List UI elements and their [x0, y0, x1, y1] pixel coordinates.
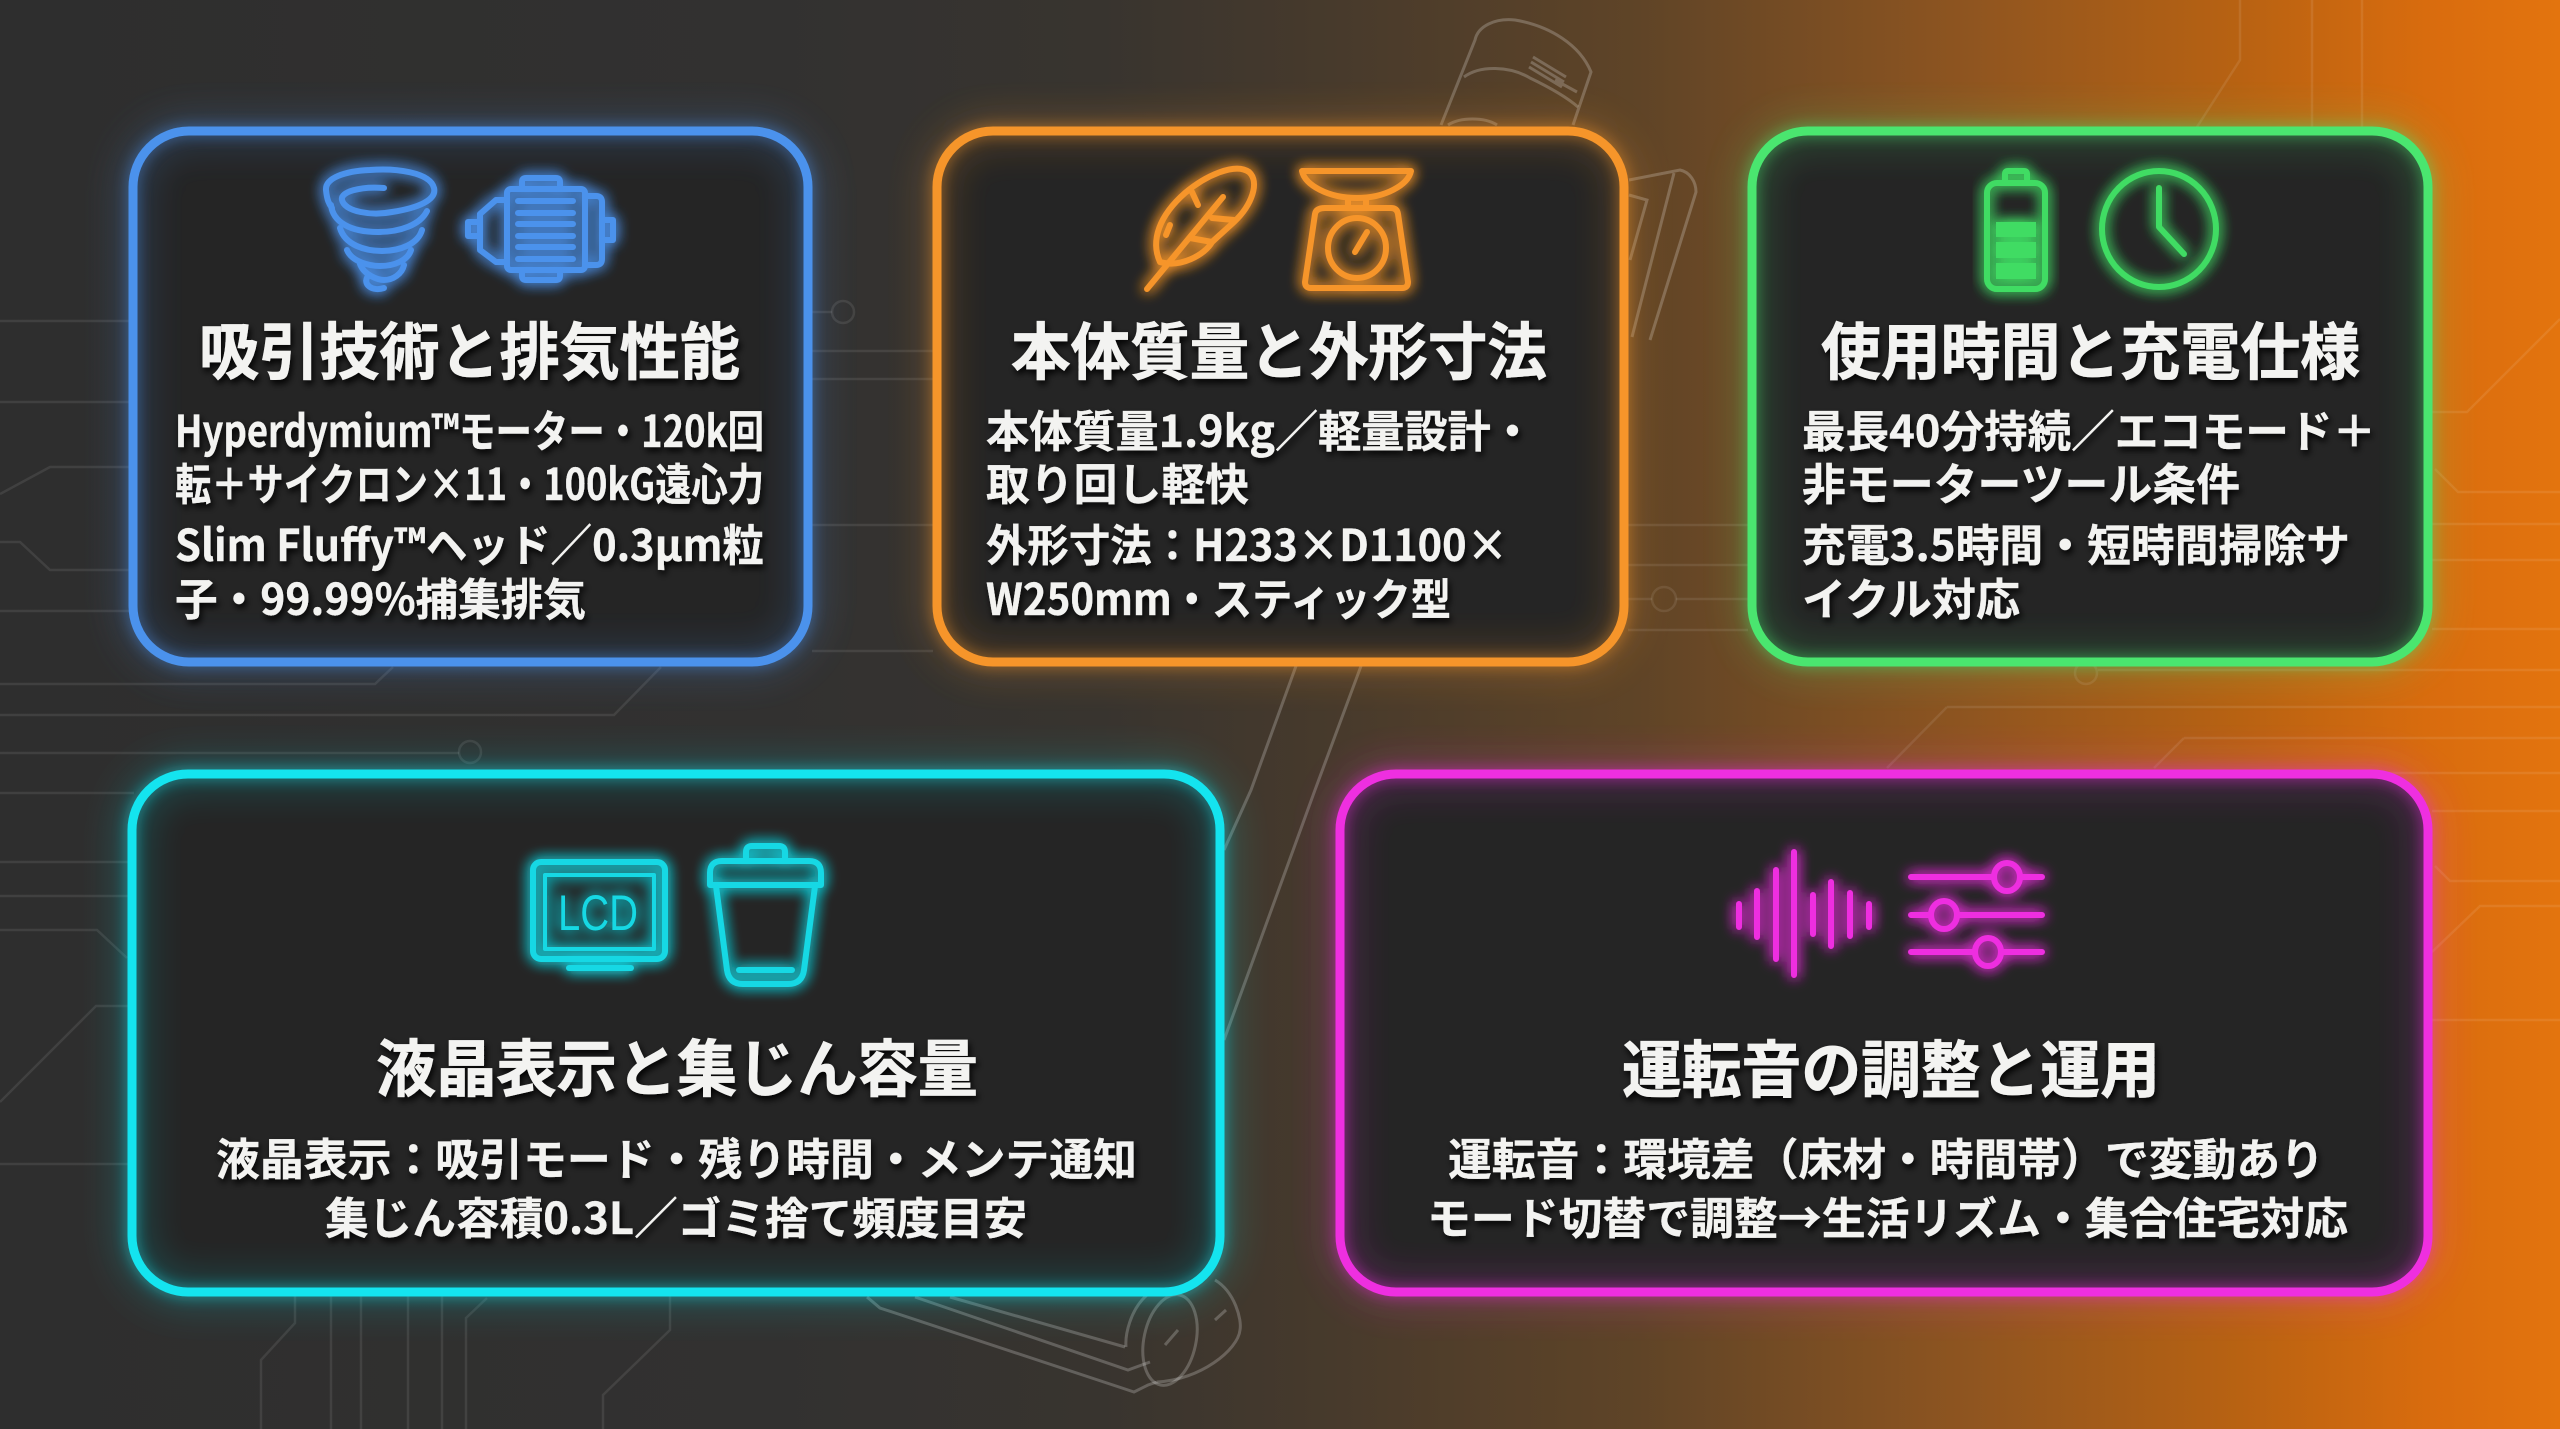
- panel: body weight and dimensions: [937, 131, 1624, 662]
- body text: モード切替で調整→生活リズム・集合住宅対応: [1427, 1183, 2348, 1247]
- icon: sliders: [1911, 863, 2042, 966]
- panel: suction technology and exhaust: [133, 131, 808, 662]
- panel: operating noise adjustment: [1340, 774, 2428, 1292]
- body text: 外形寸法：H233×D1100×: [986, 510, 1508, 574]
- icon: sound wave: [1739, 852, 1869, 975]
- title: 運転音の調整と運用: [1622, 1020, 2160, 1110]
- panel: run time and charging: [1752, 131, 2428, 662]
- icon: dust cup: [710, 846, 821, 984]
- neon border: [1752, 131, 2428, 662]
- neon border: [937, 131, 1624, 662]
- title: 液晶表示と集じん容量: [376, 1019, 978, 1109]
- title: 使用時間と充電仕様: [1821, 302, 2360, 392]
- title: 本体質量と外形寸法: [1011, 302, 1547, 392]
- icon: feather: [1147, 169, 1254, 289]
- body text: 非モーターツール条件: [1802, 449, 2240, 513]
- body text: Slim Fluffy™ヘッド／0.3μm粒: [175, 510, 764, 574]
- panel: LCD display and dust capacity: [132, 774, 1220, 1292]
- body text: 充電3.5時間・短時間掃除サ: [1802, 510, 2350, 574]
- vacuum cleaner outline: [867, 20, 1696, 1392]
- neon border: [133, 131, 808, 662]
- body text: 集じん容積0.3L／ゴミ捨て頻度目安: [325, 1183, 1027, 1247]
- panel body: [937, 131, 1624, 662]
- body text: [175, 396, 764, 628]
- panel body: [1752, 131, 2428, 662]
- title: 吸引技術と排気性能: [199, 302, 740, 392]
- neon border: [132, 774, 1220, 1292]
- body text: [1427, 1124, 2348, 1247]
- body text: 取り回し軽快: [986, 449, 1249, 513]
- body text: 最長40分持続／エコモード＋: [1802, 396, 2376, 460]
- body text: 液晶表示：吸引モード・残り時間・メンテ通知: [216, 1124, 1137, 1188]
- icon: cyclone: [326, 170, 434, 289]
- icon: battery: [1987, 171, 2045, 289]
- icon: motor: [468, 178, 613, 280]
- body text: [1802, 396, 2376, 628]
- body text: イクル対応: [1802, 564, 2020, 628]
- icon: kitchen scale: [1302, 171, 1411, 288]
- neon border: [1340, 774, 2428, 1292]
- body text: Hyperdymium™モーター・120k回: [175, 396, 764, 460]
- panel body: [133, 131, 808, 662]
- panel body: [132, 774, 1220, 1292]
- body text: W250mm・スティック型: [986, 564, 1451, 628]
- panel body: [1340, 774, 2428, 1292]
- icon: LCD monitor: LCD: [558, 885, 638, 941]
- body text: [216, 1124, 1137, 1247]
- icon: clock: [2102, 171, 2216, 287]
- body text: [986, 396, 1534, 628]
- body text: 子・99.99%捕集排気: [175, 564, 586, 628]
- body text: 運転音：環境差（床材・時間帯）で変動あり: [1448, 1124, 2324, 1188]
- body text: 転＋サイクロン×11・100kG遠心力: [175, 449, 764, 513]
- body text: 本体質量1.9kg／軽量設計・: [986, 396, 1534, 460]
- icon: LCD monitor: [533, 862, 665, 968]
